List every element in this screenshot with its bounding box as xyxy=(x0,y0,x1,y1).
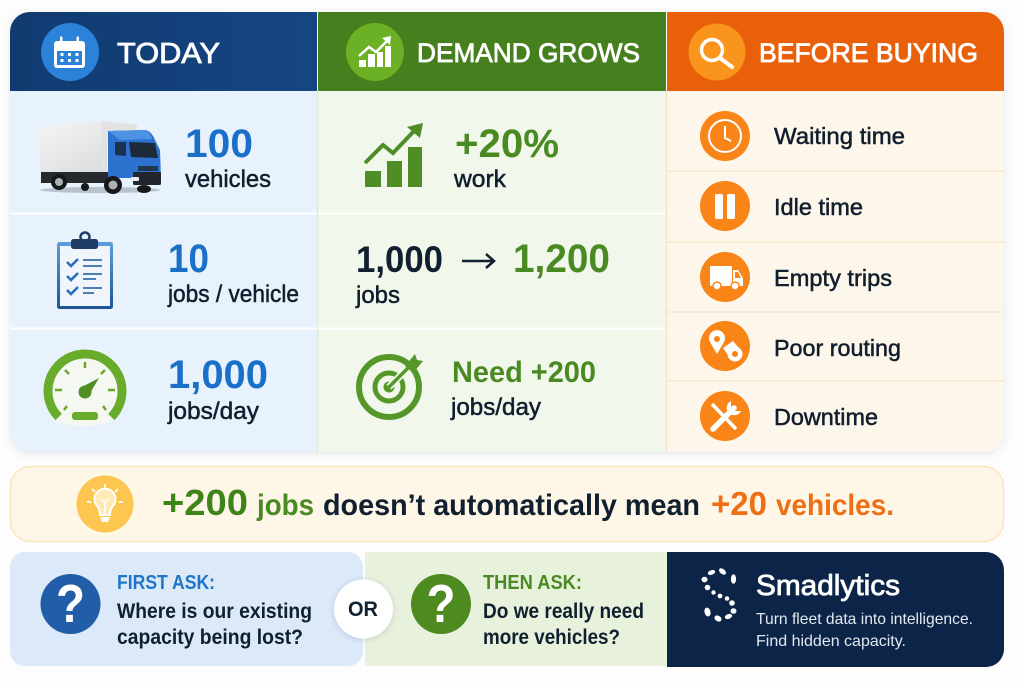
row: waiting time xyxy=(700,111,905,161)
callout text: doesn’t automatically mean xyxy=(323,489,700,522)
panel: today xyxy=(10,12,317,452)
label: work: work xyxy=(453,166,507,193)
icon: speedometer gauge xyxy=(48,354,122,426)
label: jobs: jobs xyxy=(355,282,400,309)
heading: demand grows: DEMAND GROWS xyxy=(417,38,640,68)
callout text: +20 xyxy=(711,485,767,522)
header: demand grows xyxy=(318,12,666,91)
callout text: vehicles. xyxy=(776,489,894,522)
arrow xyxy=(462,254,494,268)
panel: demand grows xyxy=(318,12,666,452)
row: jobs per day xyxy=(48,353,268,426)
row: need +200 xyxy=(359,354,596,421)
label: waiting time: Waiting time xyxy=(774,123,905,149)
icon: wrench and screwdriver xyxy=(700,391,750,441)
header: today xyxy=(10,12,317,91)
label: jobs / vehicle: jobs / vehicle xyxy=(167,281,299,308)
stat: 100: 100 xyxy=(185,122,253,166)
brand tagline: Turn fleet data into intelligence. xyxy=(756,611,973,628)
label: idle time: Idle time xyxy=(774,194,863,220)
icon: growth chart badge xyxy=(346,23,404,81)
panel: then ask xyxy=(365,552,667,666)
callout banner xyxy=(10,466,1004,542)
icon: small truck xyxy=(700,252,750,302)
row: vehicles xyxy=(40,121,271,194)
label: then ask: THEN ASK: xyxy=(483,572,582,594)
panel: main three column card xyxy=(10,12,1004,452)
callout text: +200 xyxy=(162,482,248,523)
icon: calendar xyxy=(41,23,99,81)
icon: clipboard checklist xyxy=(57,232,113,309)
stat: 1,200: 1,200 xyxy=(513,237,610,281)
header: before buying xyxy=(667,12,1004,91)
stat: 1,000: 1,000 xyxy=(168,353,268,397)
question text: more vehicles? xyxy=(483,626,620,649)
brand tagline: Find hidden capacity. xyxy=(756,633,906,650)
callout text xyxy=(162,482,894,523)
row: jobs growth xyxy=(355,237,610,309)
stat: 1,000: 1,000 xyxy=(356,239,443,280)
question text: Where is our existing xyxy=(117,600,312,623)
icon: blue question mark xyxy=(40,574,100,634)
question text xyxy=(117,600,312,649)
panel: before buying xyxy=(667,12,1004,452)
stat: +20%: +20% xyxy=(455,122,559,166)
label: downtime: Downtime xyxy=(774,404,878,430)
icon: rising bar chart xyxy=(365,123,423,187)
icon: map pins xyxy=(700,321,750,371)
row: empty trips xyxy=(700,252,892,302)
icon: target with arrow xyxy=(359,354,423,417)
panel: first ask xyxy=(10,552,363,666)
question text xyxy=(483,600,644,649)
icon: magnifier xyxy=(688,24,746,80)
icon: delivery truck xyxy=(40,121,161,194)
icon: blue question mark: ? xyxy=(56,574,85,634)
heading: today: TODAY xyxy=(117,38,220,70)
icon: light bulb xyxy=(76,476,134,532)
or badge xyxy=(334,580,393,638)
brand name: Smadlytics xyxy=(756,570,900,602)
stat: need +200: Need +200 xyxy=(452,356,596,389)
label: jobs/day: jobs/day xyxy=(167,398,259,425)
icon: smadlytics logo dots xyxy=(702,567,736,623)
row: jobs per vehicle xyxy=(57,232,299,309)
or badge: OR xyxy=(348,598,378,621)
stat: 10: 10 xyxy=(168,237,209,281)
panel: smadlytics brand xyxy=(667,552,1004,667)
label: first ask: FIRST ASK: xyxy=(117,572,215,594)
question text: Do we really need xyxy=(483,600,644,623)
row: idle time xyxy=(700,181,863,231)
icon: green question mark: ? xyxy=(426,574,456,634)
heading: before buying: BEFORE BUYING xyxy=(759,38,978,68)
row: poor routing xyxy=(700,321,901,371)
label: empty trips: Empty trips xyxy=(774,265,892,291)
label: vehicles: vehicles xyxy=(185,166,271,193)
icon: pause xyxy=(700,181,750,231)
callout text: jobs xyxy=(256,489,314,522)
icon: green question mark xyxy=(411,574,471,634)
label: poor routing: Poor routing xyxy=(774,335,901,361)
label: jobs/day: jobs/day xyxy=(450,394,541,421)
question text: capacity being lost? xyxy=(117,626,303,649)
icon: clock xyxy=(700,111,750,161)
row: downtime xyxy=(700,391,878,441)
brand tagline xyxy=(756,611,973,650)
row: +20% work xyxy=(365,122,559,193)
